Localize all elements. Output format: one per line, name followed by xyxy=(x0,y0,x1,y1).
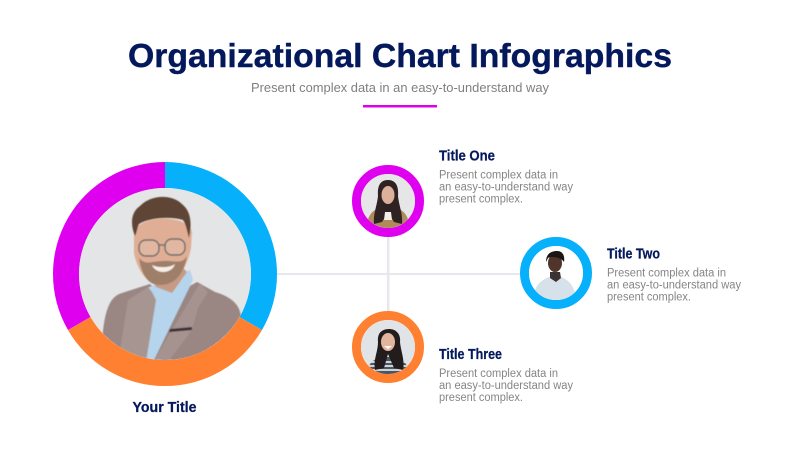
body text: Present complex data in xyxy=(439,170,558,182)
main label: Your Title xyxy=(132,400,196,416)
body text xyxy=(607,268,741,304)
node: Title One xyxy=(356,148,573,232)
ring segment: magenta xyxy=(53,162,165,330)
heading: Title Three xyxy=(439,347,502,363)
main portrait ring xyxy=(53,162,277,386)
body text: Present complex data in xyxy=(607,268,726,280)
body text: an easy-to-understand way xyxy=(439,380,573,392)
magenta ring xyxy=(356,170,420,232)
portrait: woman in striped top xyxy=(361,320,415,376)
portrait: woman with long dark hair xyxy=(361,174,415,230)
body text xyxy=(439,170,573,206)
body text xyxy=(439,368,573,404)
body text: an easy-to-understand way xyxy=(439,182,573,194)
orange ring xyxy=(356,316,420,378)
ring segment: orange xyxy=(68,317,262,386)
body text: present complex. xyxy=(607,292,691,304)
portrait: man in light shirt xyxy=(529,246,583,300)
body text: present complex. xyxy=(439,194,523,206)
body text: Present complex data in xyxy=(439,368,558,380)
body text: present complex. xyxy=(439,392,523,404)
connector lines xyxy=(276,236,522,312)
blue ring xyxy=(524,242,588,304)
subtitle: Present complex data in an easy-to-understand way xyxy=(251,80,549,95)
accent underline xyxy=(363,105,437,108)
node: Title Three xyxy=(356,316,573,404)
title: Organizational Chart Infographics xyxy=(128,37,672,74)
portrait: man in tweed jacket xyxy=(79,188,251,365)
node: Title Two xyxy=(524,242,741,304)
heading: Title One xyxy=(439,148,495,164)
ring segment: blue xyxy=(165,162,277,330)
body text: an easy-to-understand way xyxy=(607,280,741,292)
heading: Title Two xyxy=(607,246,660,262)
